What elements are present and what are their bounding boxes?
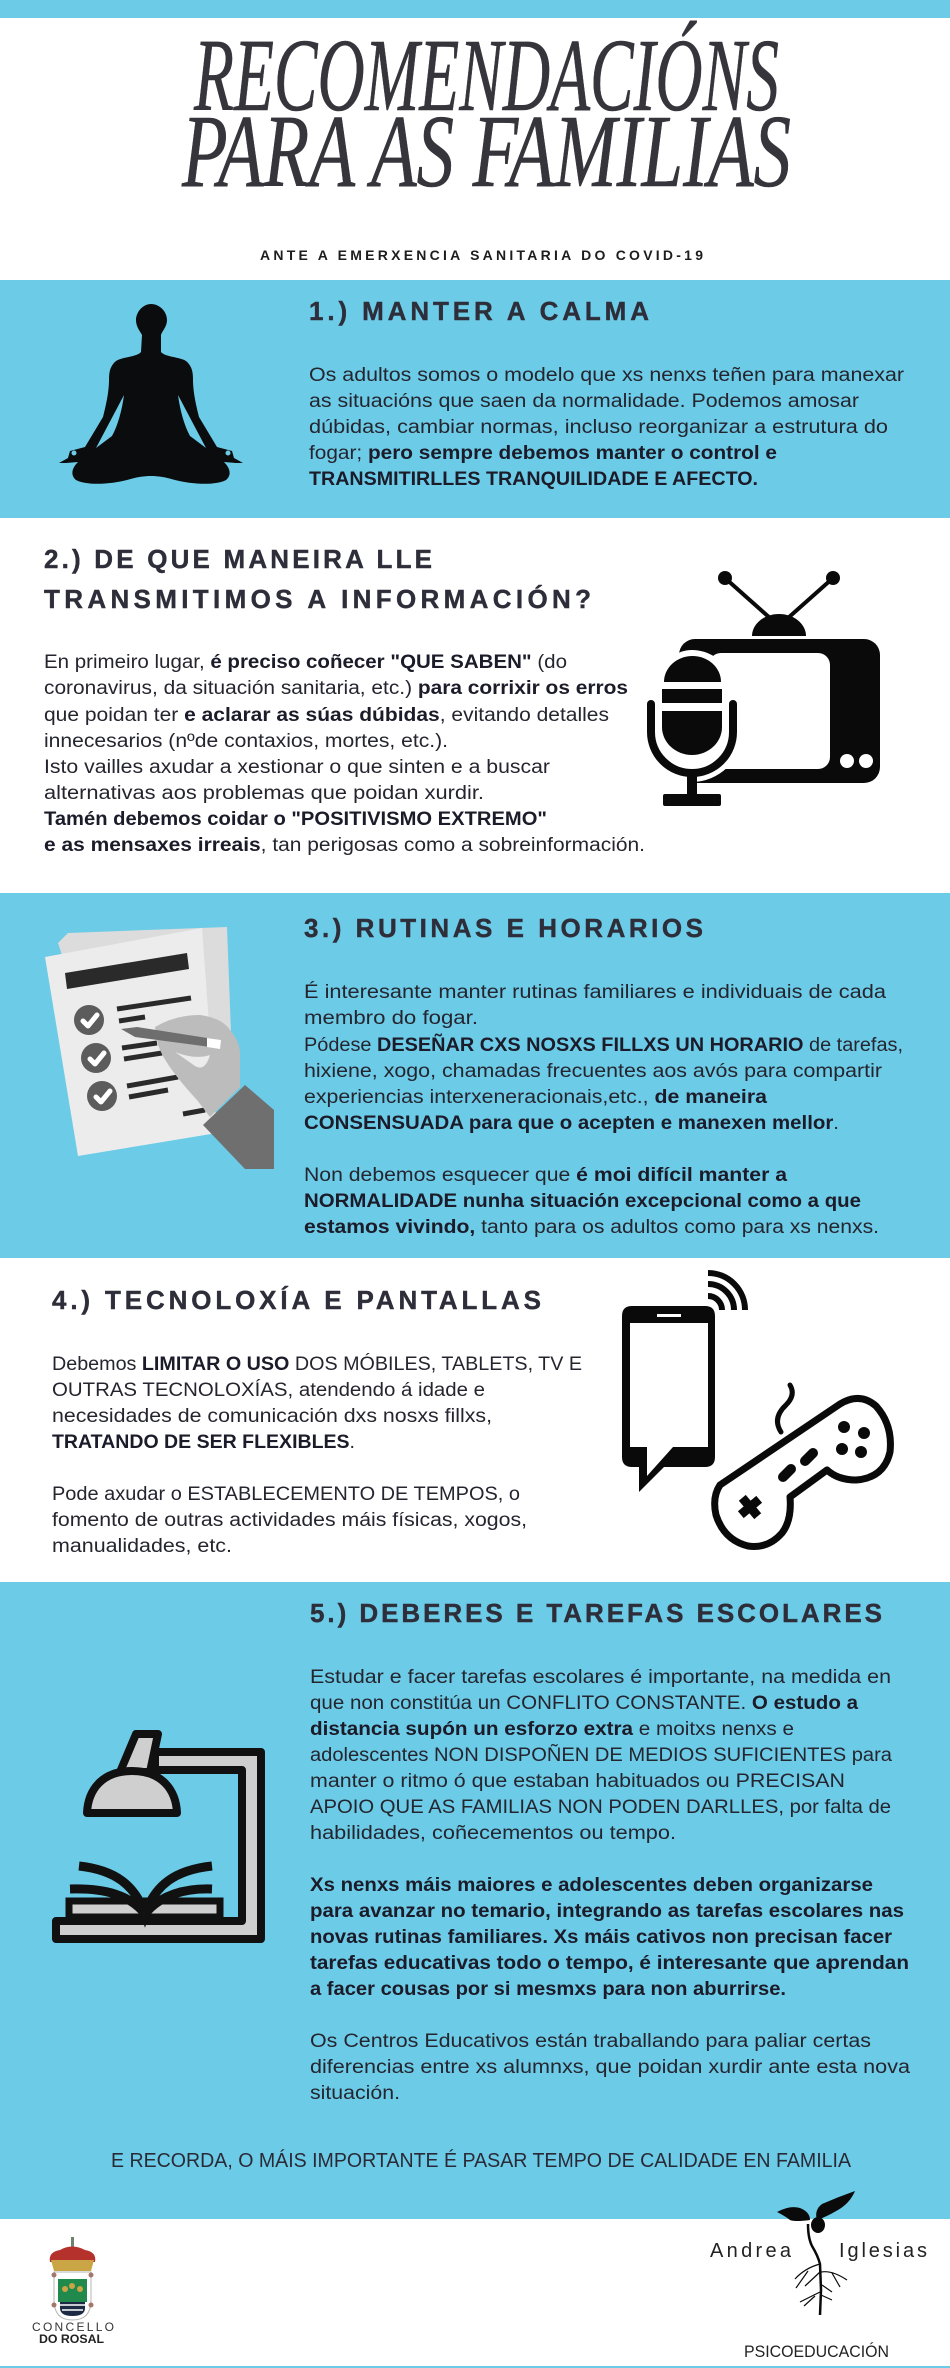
body text: experiencias interxeneracionais,etc., de maneira bbox=[304, 1087, 767, 1108]
body text: En primeiro lugar, é preciso coñecer "QUE SABEN" (do bbox=[44, 652, 567, 673]
icon: desk lamp and book bbox=[56, 1734, 261, 1939]
body text: distancia supón un esforzo extra e moitxs nenxs e bbox=[310, 1719, 794, 1740]
body text: novas rutinas familiares. Xs máis cativos non precisan facer bbox=[310, 1927, 893, 1948]
bottom band bbox=[0, 2366, 950, 2368]
icon: sprout with roots bbox=[777, 2191, 855, 2315]
body text bbox=[52, 1353, 582, 1557]
body text: APOIO QUE AS FAMILIAS NON PODEN DARLLES, por falta de bbox=[310, 1797, 891, 1818]
body text: habilidades, coñecementos ou tempo. bbox=[310, 1823, 676, 1844]
body text: estamos vivindo, tanto para os adultos como para xs nenxs. bbox=[304, 1217, 879, 1238]
heading bbox=[44, 544, 591, 614]
body text: para avanzar no temario, integrando as tarefas escolares nas bbox=[310, 1901, 904, 1922]
body text: as situacións que saen da normalidade. Podemos amosar bbox=[309, 391, 860, 412]
body text: NORMALIDADE nunha situación excepcional como a que bbox=[304, 1191, 861, 1212]
icon: game controller bbox=[715, 1385, 890, 1546]
panel: 2 transmitir a información bbox=[44, 544, 880, 856]
body text: necesidades de comunicación dxs nosxs fillxs, bbox=[52, 1406, 492, 1427]
icon: tv and microphone bbox=[642, 571, 880, 806]
body text: fomento de outras actividades máis físicas, xogos, bbox=[52, 1510, 527, 1531]
icon: coat of arms bbox=[50, 2237, 95, 2320]
icon: smartphone with signal bbox=[622, 1273, 745, 1492]
panel: 5 deberes e tarefas escolares bbox=[0, 1582, 950, 2219]
body text: membro do fogar. bbox=[304, 1008, 478, 1029]
tagline: PSICOEDUCACIÓN bbox=[744, 2342, 889, 2361]
top band bbox=[0, 0, 950, 18]
heading: 4.) TECNOLOXÍA E PANTALLAS bbox=[52, 1285, 541, 1315]
body text: Xs nenxs máis maiores e adolescentes deben organizarse bbox=[310, 1875, 873, 1896]
icon: checklist and hand bbox=[45, 927, 274, 1169]
logo: concello do rosal: DO ROSAL bbox=[39, 2332, 104, 2346]
closing message: E RECORDA, O MÁIS IMPORTANTE É PASAR TEMPO DE CALIDADE EN FAMILIA bbox=[111, 2149, 852, 2172]
title bbox=[181, 18, 791, 209]
panel: 4 tecnoloxía e pantallas bbox=[52, 1273, 890, 1557]
heading: 3.) RUTINAS E HORARIOS bbox=[304, 913, 703, 943]
body text: e as mensaxes irreais , tan perigosas como a sobreinformación. bbox=[44, 835, 645, 856]
body text: adolescentes NON DISPOÑEN DE MEDIOS SUFICIENTES para bbox=[310, 1744, 892, 1766]
body text: innecesarios (nºde contaxios, mortes, etc.). bbox=[44, 731, 448, 752]
body text bbox=[309, 365, 905, 490]
body text bbox=[304, 982, 903, 1238]
body text: tarefas educativas todo o tempo, é interesante que aprendan bbox=[310, 1953, 909, 1974]
logo: concello do rosal bbox=[32, 2237, 114, 2346]
body text: É interesante manter rutinas familiares e individuais de cada bbox=[304, 982, 886, 1003]
body text: manualidades, etc. bbox=[52, 1536, 232, 1557]
body text: Estudar e facer tarefas escolares é importante, na medida en bbox=[310, 1667, 891, 1688]
body text: Pódese DESEÑAR CXS NOSXS FILLXS UN HORARIO de tarefas, bbox=[304, 1034, 903, 1056]
body text bbox=[310, 1667, 910, 2104]
author name bbox=[710, 2240, 927, 2262]
body text bbox=[44, 652, 645, 856]
body text: hixiene, xogo, chamadas frecuentes aos avós para compartir bbox=[304, 1061, 883, 1082]
body text: a facer cousas por si mesmxs para non aburrirse. bbox=[310, 1979, 786, 2000]
logo: andrea iglesias bbox=[710, 2191, 927, 2361]
body text: manter o ritmo ó que estaban habituados ou PRECISAN bbox=[310, 1771, 845, 1792]
body text: OUTRAS TECNOLOXÍAS, atendendo á idade e bbox=[52, 1380, 485, 1401]
body text: que non constitúa un CONFLITO CONSTANTE. O estudo a bbox=[310, 1693, 858, 1714]
author name: Iglesias bbox=[839, 2240, 927, 2262]
body text: TRANSMITIRLLES TRANQUILIDADE E AFECTO. bbox=[309, 469, 758, 490]
body text: CONSENSUADA para que o acepten e manexen mellor . bbox=[304, 1113, 839, 1134]
body text: coronavirus, da situación sanitaria, etc.) para corrixir os erros bbox=[44, 678, 628, 699]
body text: situación. bbox=[310, 2083, 400, 2104]
icon: meditating figure bbox=[59, 304, 243, 484]
logo text: CONCELLO bbox=[32, 2320, 114, 2334]
body text: diferencias entre xs alumnxs, que poidan xurdir ante esta nova bbox=[310, 2057, 910, 2078]
body text: fogar; pero sempre debemos manter o control e bbox=[309, 443, 777, 464]
subtitle: ANTE A EMERXENCIA SANITARIA DO COVID-19 bbox=[260, 247, 703, 263]
heading: 2.) DE QUE MANEIRA LLE bbox=[44, 544, 432, 574]
panel: 3 rutinas e horarios bbox=[0, 893, 950, 1258]
body text: Os Centros Educativos están traballando para paliar certas bbox=[310, 2031, 871, 2052]
body text: Tamén debemos coidar o "POSITIVISMO EXTREMO" bbox=[44, 809, 547, 830]
panel: 1 manter a calma bbox=[0, 280, 950, 518]
body text: Non debemos esquecer que é moi difícil manter a bbox=[304, 1165, 787, 1186]
body text: que poidan ter e aclarar as súas dúbidas , evitando detalles bbox=[44, 705, 609, 726]
body text: alternativas aos problemas que poidan xurdir. bbox=[44, 783, 484, 804]
heading: TRANSMITIMOS A INFORMACIÓN? bbox=[44, 584, 591, 614]
author name: Andrea bbox=[710, 2240, 792, 2262]
body text: Isto vailles axudar a xestionar o que sinten e a buscar bbox=[44, 757, 551, 778]
body text: Pode axudar o ESTABLECEMENTO DE TEMPOS, o bbox=[52, 1484, 520, 1505]
body text: TRATANDO DE SER FLEXIBLES . bbox=[52, 1432, 355, 1453]
heading: 5.) DEBERES E TAREFAS ESCOLARES bbox=[310, 1598, 882, 1628]
heading: 1.) MANTER A CALMA bbox=[309, 296, 649, 326]
body text: Debemos LIMITAR O USO DOS MÓBILES, TABLETS, TV E bbox=[52, 1353, 582, 1375]
body text: Os adultos somos o modelo que xs nenxs teñen para manexar bbox=[309, 365, 905, 386]
body text: dúbidas, cambiar normas, incluso reorganizar a estrutura do bbox=[309, 417, 888, 438]
